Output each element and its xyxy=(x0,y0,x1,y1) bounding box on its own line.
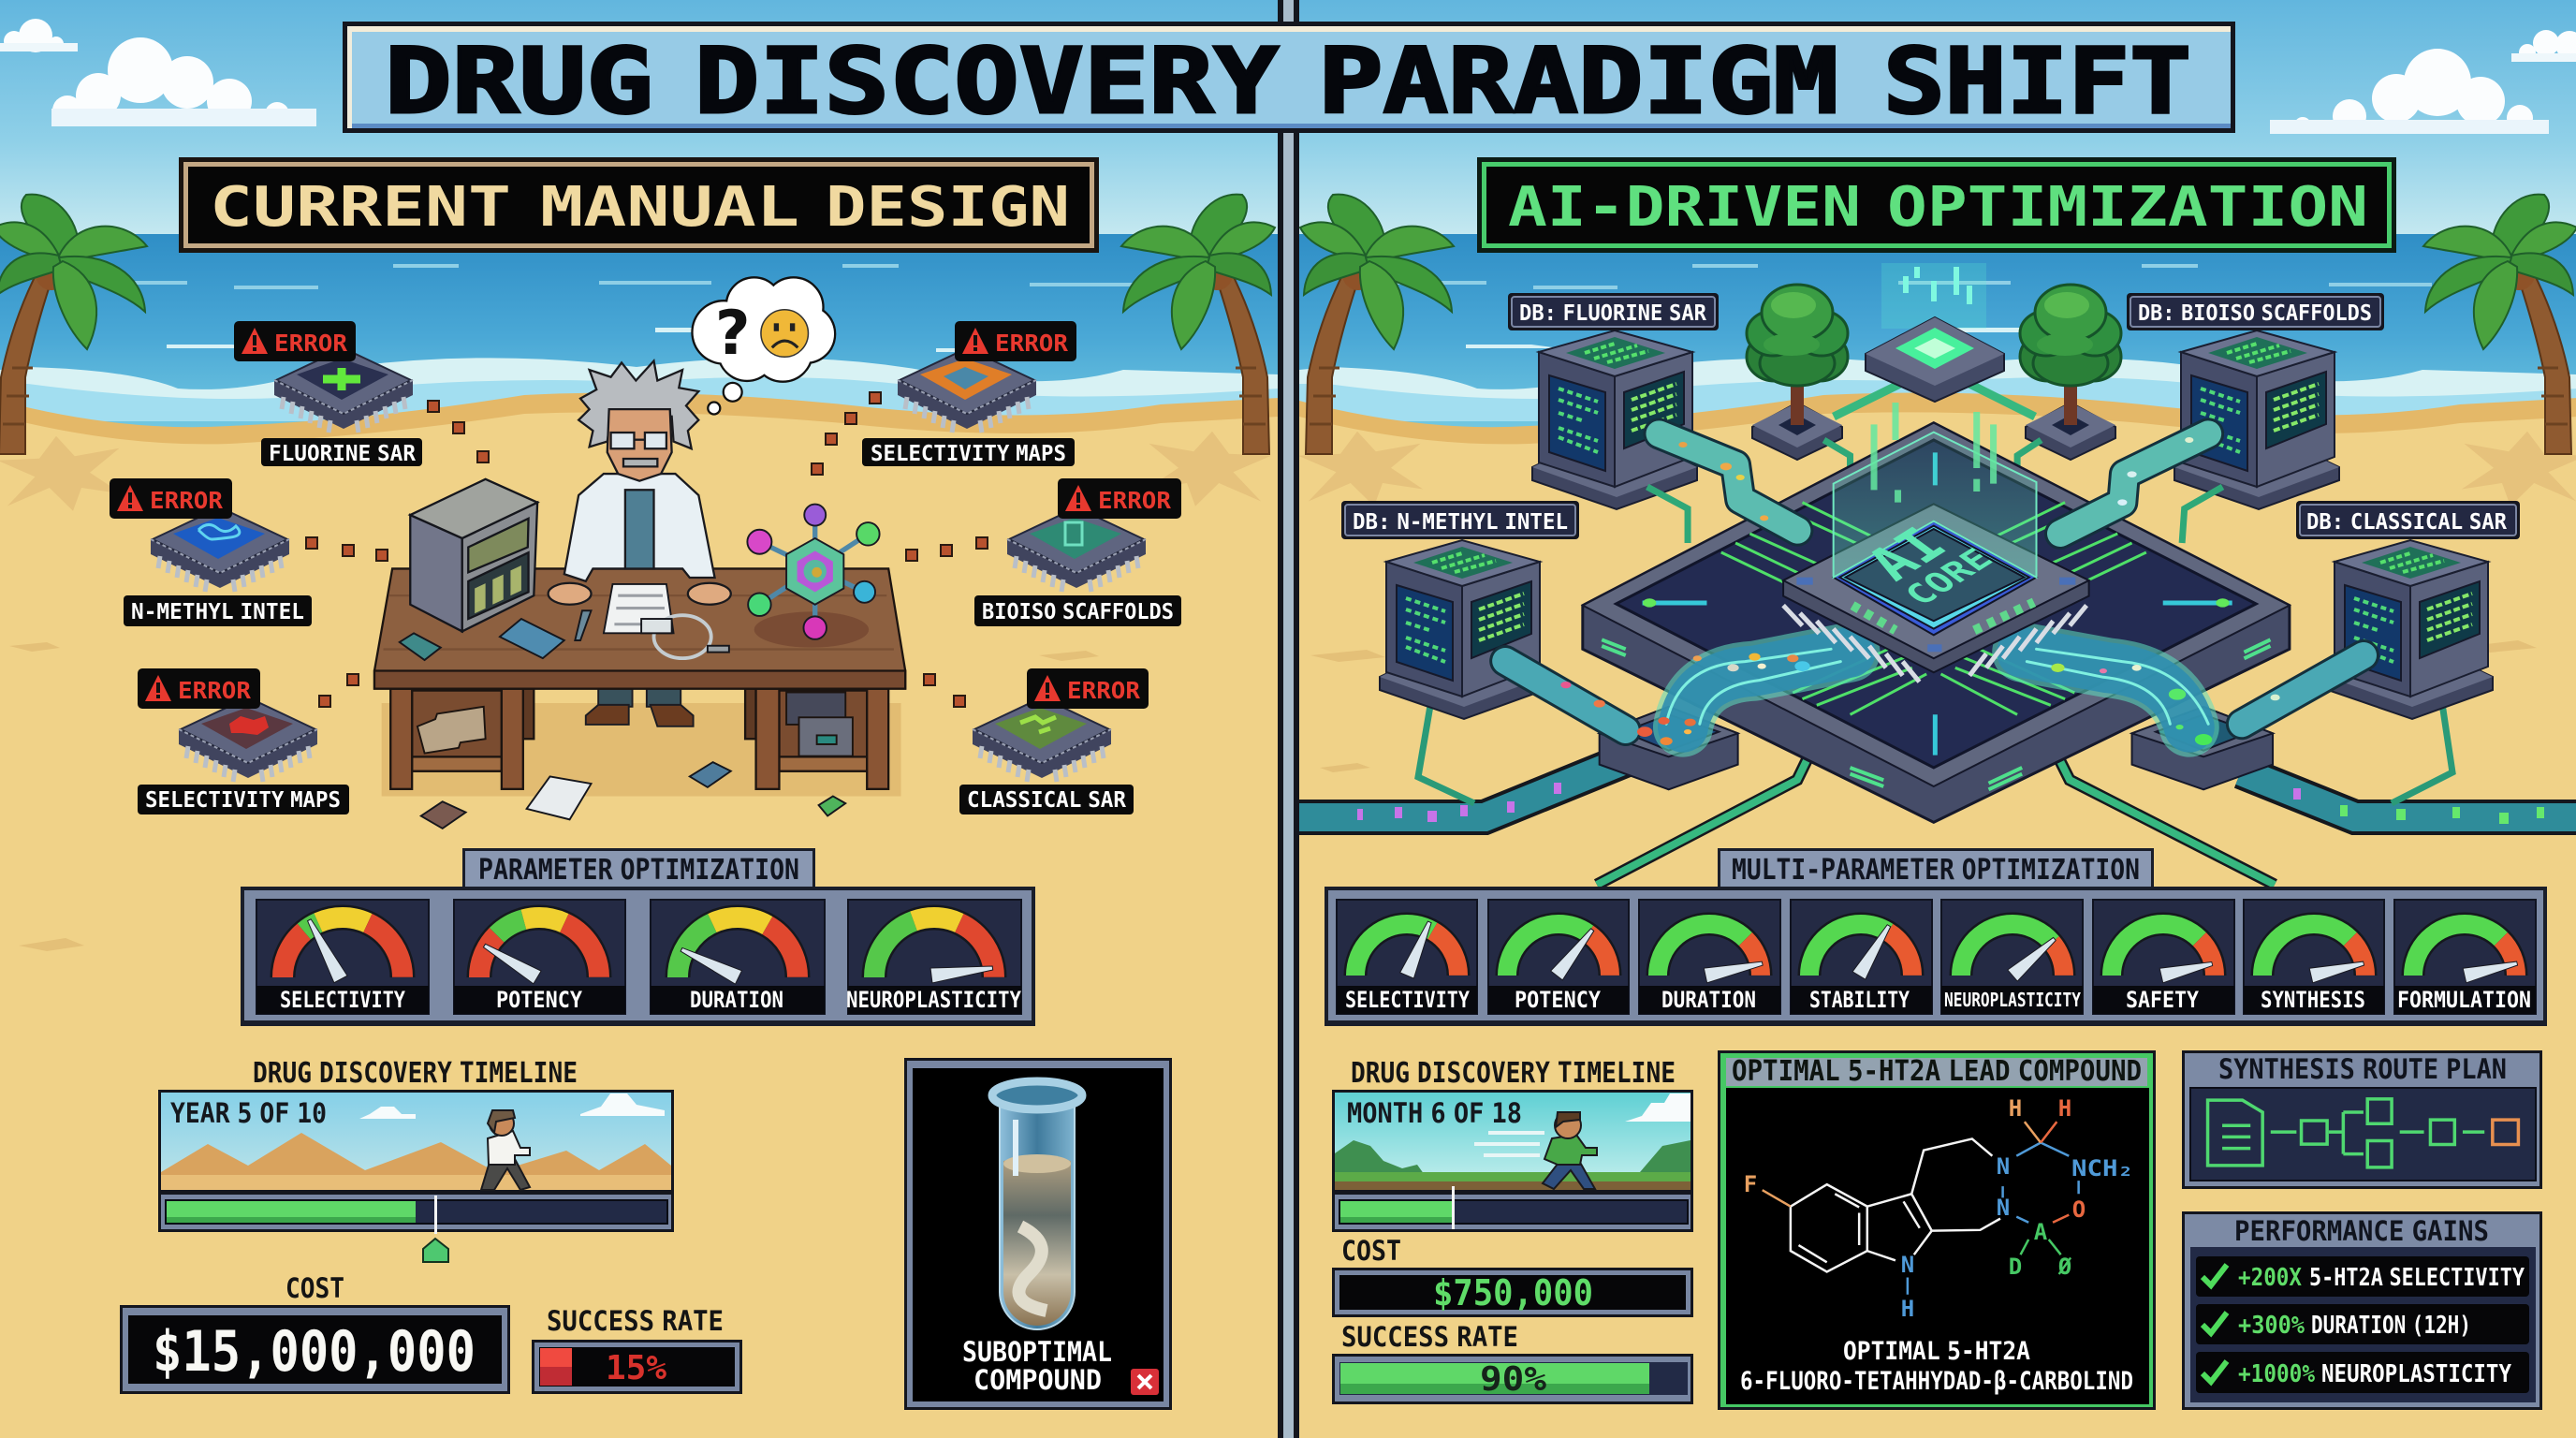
timeline: AI-driven xyxy=(1332,1057,1693,1232)
performance gains panel xyxy=(2182,1211,2542,1410)
title banner: PARADIGM xyxy=(1318,29,1838,134)
DB label: fluorine SAR xyxy=(1508,293,1719,330)
scientist legs xyxy=(586,689,694,726)
small sensor node xyxy=(1866,263,2004,402)
desk xyxy=(374,568,905,789)
atom labels: N xyxy=(1997,1195,2010,1221)
gauge: duration xyxy=(1658,924,1764,1013)
clouds xyxy=(0,19,2576,134)
forest scene xyxy=(1332,1090,1693,1193)
chip: selectivity maps (bottom) xyxy=(138,668,317,782)
gauge: selectivity: SELECTIVITY xyxy=(280,987,405,1013)
lab machine xyxy=(410,479,537,631)
palm tree: right panel left xyxy=(1300,195,1454,454)
database server: classical SAR xyxy=(2328,540,2493,719)
cost readout: AI-driven: $750,000 xyxy=(1433,1272,1593,1313)
chip: fluorine SAR xyxy=(234,321,413,433)
heading: current manual design: DESIGN xyxy=(826,174,1070,239)
gauge: stability: STABILITY xyxy=(1809,987,1910,1013)
hologram xyxy=(1834,433,2037,578)
tree: left xyxy=(1747,285,1848,460)
atom labels: D xyxy=(2009,1254,2022,1280)
data flow pipes xyxy=(1505,433,2364,730)
AI core platform xyxy=(1505,403,2364,822)
thought bubble xyxy=(694,278,834,415)
performance gains panel: PERFORMANCE GAINS xyxy=(2234,1215,2489,1247)
label: bioiso scaffolds: BIOISO SCAFFOLDS xyxy=(982,600,1174,624)
palm tree: right panel right xyxy=(2423,195,2576,454)
AI core lettering: AI xyxy=(1853,518,1960,591)
molecule bonds xyxy=(1763,1122,2079,1295)
filing box under desk xyxy=(786,692,853,756)
cost readout: current manual: COST xyxy=(285,1272,344,1304)
DB label: fluorine SAR: DB: FLUORINE SAR xyxy=(1519,301,1706,326)
label: fluorine SAR: FLUORINE SAR xyxy=(269,442,416,466)
gain row: duration: DURATION (12H) xyxy=(2311,1312,2471,1340)
success rate: current manual xyxy=(532,1305,742,1394)
gain row: neuroplasticity: +1000% xyxy=(2238,1360,2315,1388)
error badge: ERROR xyxy=(150,487,224,514)
gauge: selectivity xyxy=(1345,919,1470,1013)
atom labels: F xyxy=(1744,1171,1757,1197)
gauge label strips xyxy=(1337,986,2536,1014)
cost readout: AI-driven xyxy=(1332,1235,1693,1317)
heading: AI-driven optimization: AI-DRIVEN xyxy=(1508,174,1861,239)
debris on sand xyxy=(421,762,845,829)
title banner: DISCOVERY xyxy=(695,29,1279,134)
database server: bioiso scaffolds xyxy=(2174,330,2339,509)
panel: parameter optimization xyxy=(241,848,1035,1026)
lead compound card xyxy=(1718,1050,2156,1410)
DB label: classical SAR xyxy=(2296,501,2520,539)
desk items xyxy=(400,584,729,660)
gauge: safety xyxy=(2112,924,2215,1013)
suboptimal compound card xyxy=(904,1058,1172,1410)
forest scene: MONTH 6 OF 18 xyxy=(1347,1097,1522,1129)
chip: bioiso scaffolds xyxy=(1007,478,1181,592)
suboptimal compound card: SUBOPTIMAL xyxy=(962,1336,1112,1368)
error badge: ERROR xyxy=(995,330,1069,357)
heading: current manual design xyxy=(179,157,1099,253)
error badge xyxy=(955,321,1076,361)
error badge xyxy=(110,478,232,519)
label: classical SAR: CLASSICAL SAR xyxy=(967,788,1126,813)
DB label: classical SAR: DB: CLASSICAL SAR xyxy=(2306,510,2507,535)
heading: current manual design: MANUAL xyxy=(540,174,799,239)
database server: N-methyl intel xyxy=(1380,540,1544,719)
timeline heading: DRUG DISCOVERY TIMELINE xyxy=(1351,1057,1676,1090)
synthesis route plan panel: SYNTHESIS ROUTE PLAN xyxy=(2218,1053,2507,1085)
tab: PARAMETER OPTIMIZATION xyxy=(478,854,799,887)
running researcher xyxy=(1543,1112,1597,1189)
atom labels: H xyxy=(2058,1095,2071,1122)
cost readout: AI-driven: COST xyxy=(1341,1235,1401,1267)
lead compound card: OPTIMAL 5-HT2A LEAD COMPOUND xyxy=(1732,1055,2142,1088)
error badge: ERROR xyxy=(178,677,252,704)
circuit traces xyxy=(1721,503,2146,714)
tree: right xyxy=(2020,285,2121,460)
desert scene: YEAR 5 OF 10 xyxy=(170,1097,327,1129)
cost readout: current manual: $15,000,000 xyxy=(153,1319,476,1385)
flow particles xyxy=(1560,437,2280,745)
label: selectivity maps (top): SELECTIVITY MAPS xyxy=(871,442,1066,466)
atom labels: A xyxy=(2034,1219,2048,1245)
error badge: ERROR xyxy=(1098,487,1172,514)
error badge xyxy=(234,321,356,361)
gauge: neuroplasticity xyxy=(846,900,1021,1014)
chip: classical SAR xyxy=(973,668,1149,782)
gain row: neuroplasticity: NEUROPLASTICITY xyxy=(2321,1360,2511,1388)
atom labels: N xyxy=(1901,1252,1914,1278)
gain row: selectivity xyxy=(2196,1256,2529,1297)
connector dots: manual workflow xyxy=(306,392,988,707)
progress bar xyxy=(1332,1186,1693,1232)
CPU pins xyxy=(1783,606,2086,682)
error badge: ERROR xyxy=(1067,677,1141,704)
database server: fluorine SAR xyxy=(1532,330,1697,509)
gauge: stability xyxy=(1809,922,1912,1013)
wires to platform xyxy=(1647,440,2222,543)
gauge: duration xyxy=(651,900,825,1014)
gain row: duration xyxy=(2196,1304,2529,1344)
label: N-methyl intel: N-METHYL INTEL xyxy=(131,600,304,624)
gauge: duration: DURATION xyxy=(1661,987,1756,1013)
atom labels: N xyxy=(1997,1153,2010,1180)
title banner: SHIFT xyxy=(1883,29,2191,134)
error badge xyxy=(1027,668,1149,709)
synthesis route plan panel xyxy=(2182,1050,2542,1189)
progress bar xyxy=(158,1193,674,1234)
gauge: potency xyxy=(454,900,625,1014)
gauge: neuroplasticity: NEUROPLASTICITY xyxy=(846,987,1021,1013)
papers under desk xyxy=(417,707,486,754)
DB label: bioiso scaffolds: DB: BIOISO SCAFFOLDS xyxy=(2138,301,2372,326)
thought bubble: ? xyxy=(715,299,751,369)
atom labels: H xyxy=(2009,1095,2022,1122)
chip: selectivity maps (top) xyxy=(898,321,1076,433)
error badge xyxy=(1058,478,1181,519)
success rate: AI-driven: SUCCESS RATE xyxy=(1341,1321,1518,1353)
gauge: selectivity: SELECTIVITY xyxy=(1345,987,1470,1013)
atom labels: H xyxy=(1901,1296,1914,1322)
lead compound card: OPTIMAL 5-HT2A xyxy=(1843,1337,2030,1366)
gauge: synthesis: SYNTHESIS xyxy=(2261,987,2365,1013)
progress marker xyxy=(423,1239,448,1262)
atom labels: NCH₂ xyxy=(2071,1155,2133,1181)
AI core lettering: CORE xyxy=(1896,543,2002,611)
heading: AI-driven optimization xyxy=(1477,157,2396,253)
route flow diagram xyxy=(2208,1099,2518,1167)
centre divider xyxy=(1278,0,1299,1438)
gauge: duration: DURATION xyxy=(690,987,783,1013)
gauge: potency: POTENCY xyxy=(1515,987,1601,1013)
gauge: neuroplasticity xyxy=(1944,924,2081,1011)
desk shadow xyxy=(382,703,901,796)
bottom conveyors and wires xyxy=(1299,384,2576,885)
success rate: current manual: SUCCESS RATE xyxy=(547,1305,724,1337)
CPU package xyxy=(1783,504,2089,672)
gauge: safety: SAFETY xyxy=(2126,987,2199,1013)
atom labels: O xyxy=(2072,1196,2086,1223)
atom labels: Ø xyxy=(2057,1254,2072,1280)
status bars xyxy=(1643,452,2232,756)
success rate: current manual: 15% xyxy=(606,1349,666,1387)
scientist xyxy=(549,360,731,605)
tab: MULTI-PARAMETER OPTIMIZATION xyxy=(1732,854,2140,887)
gauge: neuroplasticity: NEUROPLASTICITY xyxy=(1944,989,2081,1011)
palm tree: left panel left xyxy=(0,195,147,454)
suboptimal compound card: COMPOUND xyxy=(973,1364,1102,1396)
cost readout: current manual xyxy=(120,1272,510,1394)
error badge xyxy=(138,668,260,709)
timeline heading: DRUG DISCOVERY TIMELINE xyxy=(253,1057,578,1090)
DB label: bioiso scaffolds xyxy=(2127,293,2384,330)
junction boxes xyxy=(1600,707,2273,789)
gain row: neuroplasticity xyxy=(2196,1352,2529,1393)
gauge: formulation xyxy=(2397,924,2531,1013)
DB label: N-methyl intel xyxy=(1341,501,1579,539)
molecule model xyxy=(747,505,880,648)
gauge: formulation: FORMULATION xyxy=(2397,987,2531,1013)
gauge: potency xyxy=(1507,924,1610,1013)
chip: N-methyl intel xyxy=(110,478,289,592)
gain row: duration: +300% xyxy=(2238,1312,2305,1340)
gauge cells backgrounds xyxy=(1337,900,2536,1014)
pad lights xyxy=(1852,602,2034,630)
heading: AI-driven optimization: OPTIMIZATION xyxy=(1887,174,2368,239)
manual scene: desk and scientist xyxy=(374,278,905,829)
title banner: DRUG xyxy=(385,29,653,134)
AI core lettering xyxy=(1853,518,2002,611)
walking scientist xyxy=(481,1110,530,1190)
title banner xyxy=(343,22,2235,134)
gain row: selectivity: 5-HT2A SELECTIVITY xyxy=(2309,1264,2525,1292)
success rate: AI-driven: 90% xyxy=(1480,1360,1546,1399)
timeline: current manual xyxy=(158,1057,674,1262)
atom labels xyxy=(1744,1095,2133,1322)
platform base xyxy=(1583,423,2290,822)
reject badge xyxy=(1131,1369,1159,1395)
panel: multi-parameter optimization xyxy=(1325,848,2547,1026)
DB label: N-methyl intel: DB: N-METHYL INTEL xyxy=(1353,510,1568,535)
label: selectivity maps (bottom): SELECTIVITY MAPS xyxy=(145,788,341,813)
success rate: AI-driven xyxy=(1332,1321,1693,1404)
palm tree: left panel right xyxy=(1121,195,1275,454)
test tube xyxy=(992,1081,1082,1329)
heading: current manual design: CURRENT xyxy=(210,174,511,239)
gain row: selectivity: +200X xyxy=(2238,1264,2302,1292)
lead compound card: 6-FLUORO-TETAHHYDAD-β-CARBOLIND xyxy=(1740,1367,2133,1396)
error badge: ERROR xyxy=(274,330,348,357)
desert scene xyxy=(158,1090,674,1193)
gauge: selectivity xyxy=(256,900,429,1014)
gauge: synthesis xyxy=(2261,924,2365,1013)
gauge: potency: POTENCY xyxy=(496,987,582,1013)
